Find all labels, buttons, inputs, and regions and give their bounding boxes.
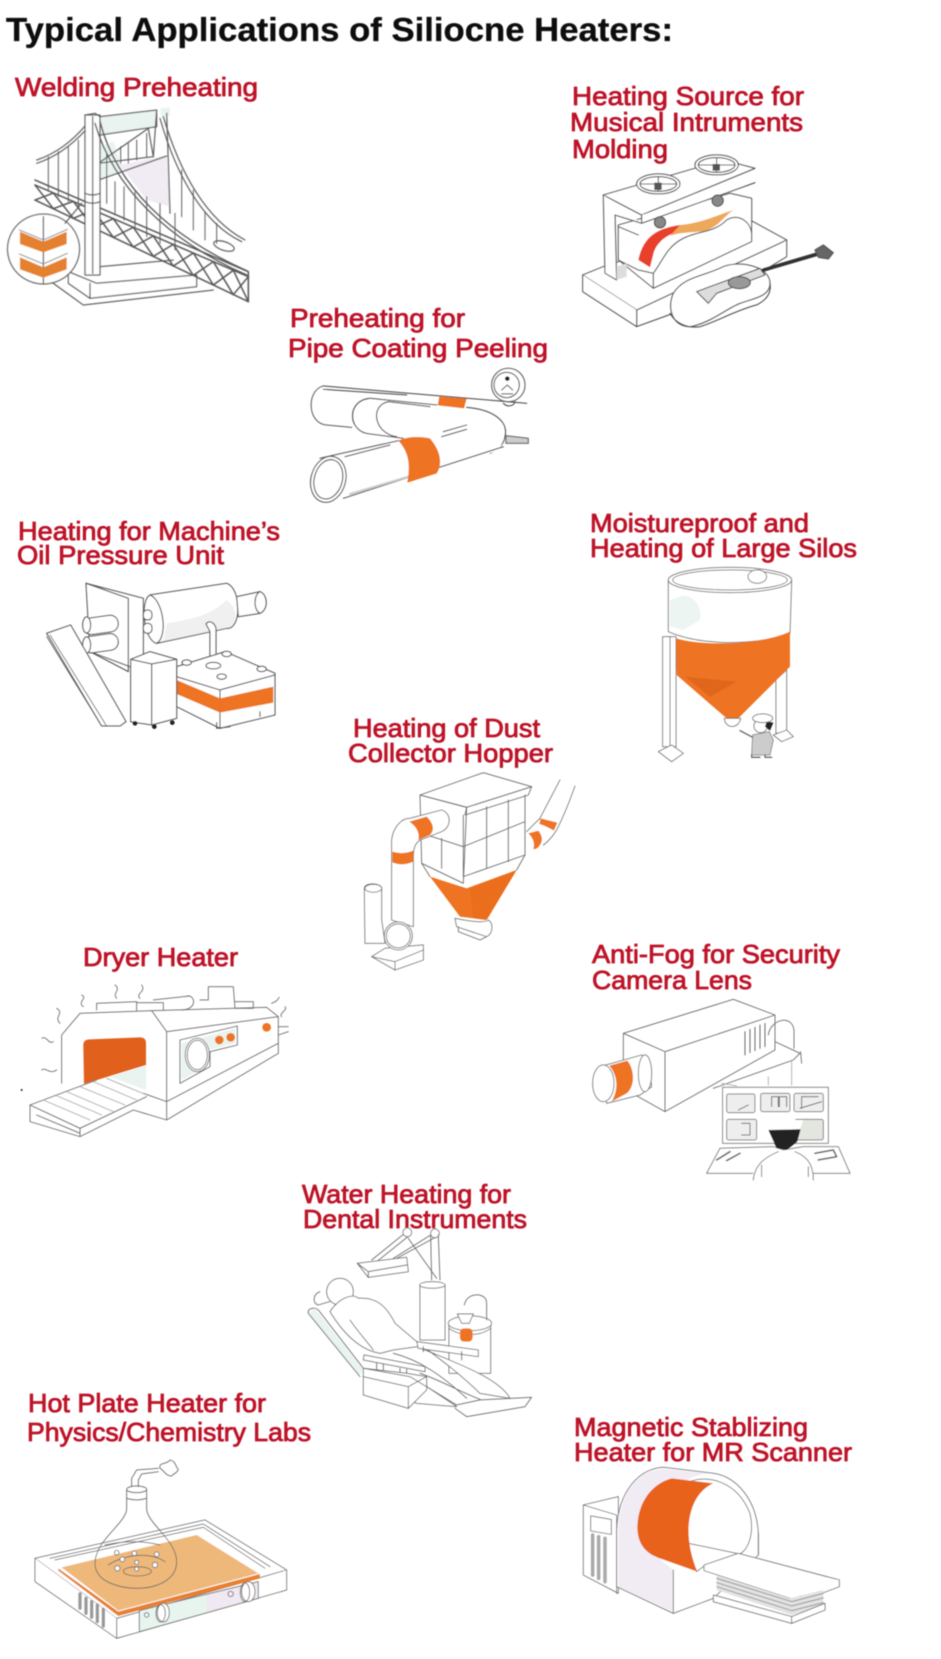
label: hot plate <box>27 1388 311 1447</box>
label: large silos <box>590 508 857 563</box>
label: dust collector hopper: Collector Hopper <box>348 738 553 768</box>
label: security camera: Anti-Fog for Security <box>592 939 840 969</box>
label: dental instruments: Water Heating for <box>302 1179 511 1209</box>
illustration: dental chair <box>308 1228 532 1417</box>
label: dust collector hopper: Heating of Dust <box>353 713 541 743</box>
label: MR scanner <box>574 1412 852 1467</box>
panel: security camera <box>592 939 850 1180</box>
label: pipe coating peeling <box>288 303 548 363</box>
panel: dental instruments <box>302 1179 532 1417</box>
label: dental instruments <box>302 1179 527 1234</box>
label: dental instruments: Dental Instruments <box>303 1204 527 1234</box>
illustration: pipes with heater bands <box>306 368 528 506</box>
label: MR scanner: Heater for MR Scanner <box>574 1437 852 1467</box>
panel: musical instruments molding <box>570 81 833 327</box>
label: musical instruments molding: Molding <box>572 134 668 164</box>
panel: welding preheating <box>7 72 258 305</box>
icon: worker <box>740 714 773 757</box>
illustration: dust collector <box>364 773 575 970</box>
illustration: hydraulic machine <box>47 583 275 729</box>
illustration: hot plate and flask <box>35 1460 287 1638</box>
label: security camera: Camera Lens <box>592 965 752 995</box>
illustration: suspension bridge <box>7 107 248 305</box>
title: Typical Applications of Siliocne Heaters: <box>6 11 673 48</box>
label: pipe coating peeling: Pipe Coating Peeling <box>288 333 548 363</box>
label: machine oil pressure unit: Heating for Machine’s <box>18 516 280 546</box>
panel: hot plate <box>27 1388 311 1638</box>
panel: dust collector hopper <box>348 713 575 970</box>
label: large silos: Heating of Large Silos <box>590 533 857 563</box>
panel: pipe coating peeling <box>288 303 548 506</box>
label: dryer heater: Dryer Heater <box>83 942 238 972</box>
panel: machine oil pressure unit <box>17 516 280 729</box>
label: hot plate: Physics/Chemistry Labs <box>27 1417 311 1447</box>
label: musical instruments molding: Heating Source for <box>572 81 804 111</box>
panel: dryer heater <box>21 942 288 1137</box>
label: large silos: Moistureproof and <box>590 508 809 538</box>
label: machine oil pressure unit <box>17 516 280 570</box>
label: musical instruments molding <box>570 81 804 164</box>
illustration: press and guitar <box>583 155 833 327</box>
label: machine oil pressure unit: Oil Pressure Unit <box>17 540 225 570</box>
label: welding preheating: Welding Preheating <box>15 72 258 102</box>
label: security camera <box>592 939 840 995</box>
panel: large silos <box>590 508 857 762</box>
label: hot plate: Hot Plate Heater for <box>28 1388 266 1418</box>
label: musical instruments molding: Musical Intruments <box>570 107 803 137</box>
label: dust collector hopper <box>348 713 553 768</box>
illustration: MR scanner <box>583 1467 839 1623</box>
illustration: tunnel dryer <box>21 985 288 1137</box>
label: pipe coating peeling: Preheating for <box>290 303 465 333</box>
illustration: silo with orange heater <box>658 567 793 762</box>
illustration: camera and monitors <box>593 999 850 1180</box>
panel: MR scanner <box>574 1412 852 1623</box>
label: MR scanner: Magnetic Stablizing <box>574 1412 808 1442</box>
